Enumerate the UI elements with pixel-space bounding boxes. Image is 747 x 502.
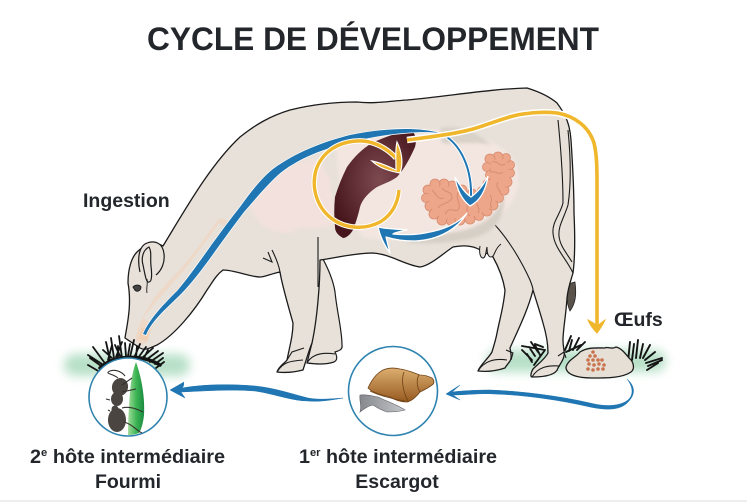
label: Ingestion: Ingestion: [83, 190, 170, 212]
caption: snail host: [299, 446, 497, 493]
blue arrow: return to liver: [378, 213, 467, 253]
organs: [248, 127, 519, 243]
blue path: ingestion and migration: [143, 129, 488, 335]
yellow loop through liver: [314, 141, 402, 227]
caption: snail host: hôte intermédiaire: [321, 446, 497, 468]
caption: snail host: Escargot: [355, 471, 439, 493]
egg mound: [566, 347, 633, 378]
caption: ant host: 2: [30, 446, 41, 468]
oesophagus tract: [142, 225, 222, 338]
organ: stomach: [248, 158, 335, 234]
snail circle: [348, 346, 438, 436]
grass patch: left: [64, 354, 190, 376]
blue arrow: eggs to snail: [446, 379, 634, 409]
far front leg: [307, 250, 342, 364]
organ: abdominal cavity: [335, 129, 519, 240]
caption: snail host: 1: [299, 446, 310, 468]
ant circle: [89, 358, 167, 436]
udder: [480, 244, 501, 258]
hooves: [277, 348, 566, 377]
leaf: [128, 362, 144, 435]
grass tuft: left of mound: [522, 336, 585, 365]
grass tuft: at muzzle: [88, 336, 164, 372]
caption: ant host: Fourmi: [95, 471, 161, 493]
caption: ant host: hôte intermédiaire: [47, 446, 225, 468]
grass tuft: right of mound: [628, 340, 662, 370]
inner leg lines: [263, 120, 573, 290]
grass patch: right: [486, 350, 666, 372]
ear: [139, 242, 164, 282]
title: CYCLE DE DÉVELOPPEMENT: [147, 21, 599, 57]
organ: intestines: [422, 152, 514, 226]
blue arrowhead: intestines: [455, 176, 488, 206]
blue path: to intestines: [447, 137, 471, 198]
tail switch: [567, 282, 576, 311]
yellow arrowhead: eggs: [588, 320, 605, 333]
eggs: [586, 350, 606, 372]
label: Œufs: Œufs: [614, 309, 663, 331]
caption: snail host: er: [310, 447, 321, 459]
caption: ant host: [30, 446, 225, 493]
yellow path: eggs to pasture: [407, 112, 605, 333]
snail shell: [368, 368, 434, 402]
eye: [133, 279, 147, 293]
caption: ant host: e: [41, 447, 47, 459]
blue arrow: snail to ant: [170, 382, 343, 401]
cow: [125, 88, 576, 377]
yellow arrowhead: liver: [372, 142, 402, 173]
snail foot: [360, 395, 405, 412]
ant: [106, 370, 143, 433]
organ: liver: [334, 132, 416, 238]
cow body: [125, 88, 575, 377]
